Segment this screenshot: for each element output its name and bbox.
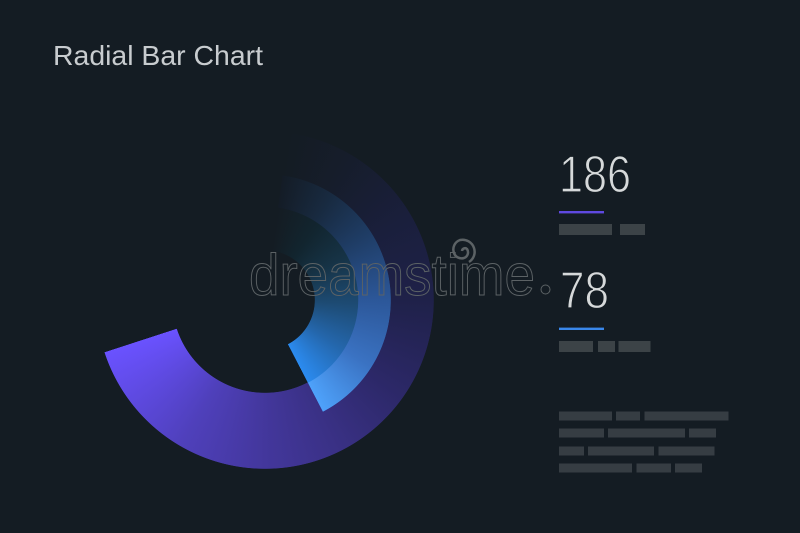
placeholder label bars	[559, 224, 645, 235]
underline purple	[559, 211, 604, 213]
watermark word: dreamstime	[249, 243, 535, 308]
title: Radial Bar Chart	[53, 40, 263, 71]
watermark registered mark	[541, 285, 550, 294]
stat: 186	[559, 146, 645, 235]
placeholder paragraph	[559, 412, 728, 472]
radial bar: purple outer	[104, 155, 434, 469]
value 186: 186	[559, 146, 631, 204]
radial bar chart	[104, 155, 434, 469]
watermark	[249, 240, 550, 308]
underline blue	[559, 328, 604, 330]
radial bar: blue middle	[290, 178, 391, 412]
value 78: 78	[560, 262, 609, 320]
placeholder label bars	[559, 341, 650, 352]
watermark spiral icon	[453, 240, 475, 262]
stat: 78	[559, 262, 650, 352]
radial bar: blue inner	[288, 212, 358, 382]
